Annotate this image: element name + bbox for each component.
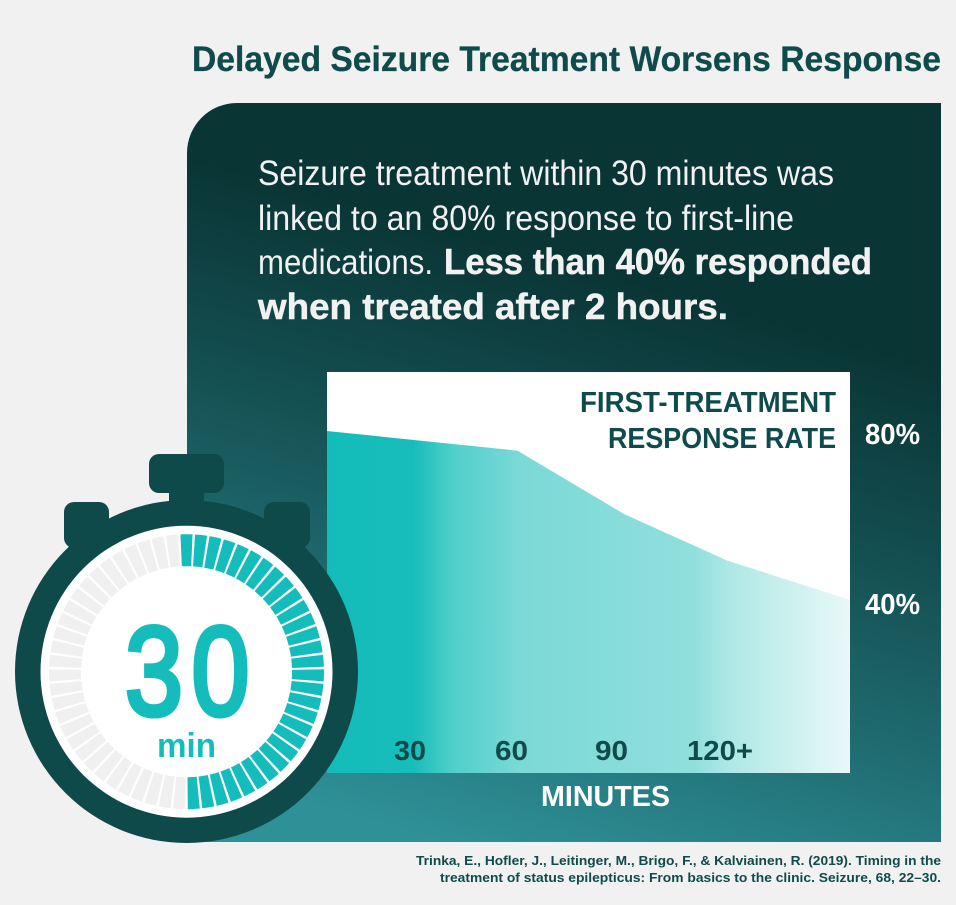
chart background — [327, 372, 850, 773]
stopwatch top button — [149, 454, 224, 515]
text block: summary: Seizure treatment within 30 minutes was — [258, 154, 834, 193]
stopwatch number — [125, 601, 250, 742]
chart heading: RESPONSE RATE — [608, 423, 836, 455]
stopwatch unit: min — [157, 727, 216, 765]
citation: treatment of status epilepticus: From basics to the clinic. Seizure, 68, 22–30. — [440, 871, 941, 885]
title: Delayed Seizure Treatment Worsens Response — [192, 40, 941, 79]
elapsed ticks — [60, 545, 313, 798]
area: response rate — [327, 431, 850, 773]
y-axis label: 40%: 40% — [865, 589, 920, 621]
citation: Trinka, E., Hofler, J., Leitinger, M., Brigo, F., & Kalviainen, R. (2019). Timing in the — [416, 854, 941, 868]
text block: summary — [257, 154, 872, 327]
x-axis title: MINUTES — [541, 781, 670, 813]
remaining ticks — [60, 545, 313, 798]
stopwatch number: 3 — [125, 601, 183, 742]
x-axis labels: 120+ — [687, 735, 753, 766]
stopwatch body — [15, 500, 358, 843]
y-axis label: 80%: 80% — [865, 419, 920, 451]
x-axis labels: 30 — [394, 735, 426, 766]
chart heading — [580, 387, 836, 455]
x-axis labels — [394, 735, 753, 766]
stopwatch side buttons — [64, 502, 310, 570]
stopwatch face — [40, 526, 332, 818]
text block: summary: linked to an 80% response to first-line — [258, 199, 794, 238]
text block: summary: medications. — [258, 243, 433, 282]
chart: first-treatment response rate — [327, 372, 920, 813]
text block: summary: when treated after 2 hours. — [257, 286, 728, 327]
chart heading: FIRST-TREATMENT — [580, 387, 836, 419]
x-axis labels: 60 — [495, 735, 528, 766]
icon: stopwatch — [15, 454, 358, 843]
stopwatch number: 0 — [192, 601, 250, 742]
citation — [416, 854, 941, 885]
panel: gradient background — [187, 103, 941, 842]
x-axis labels: 90 — [595, 735, 628, 766]
text block: summary: Less than 40% responded — [444, 241, 872, 282]
